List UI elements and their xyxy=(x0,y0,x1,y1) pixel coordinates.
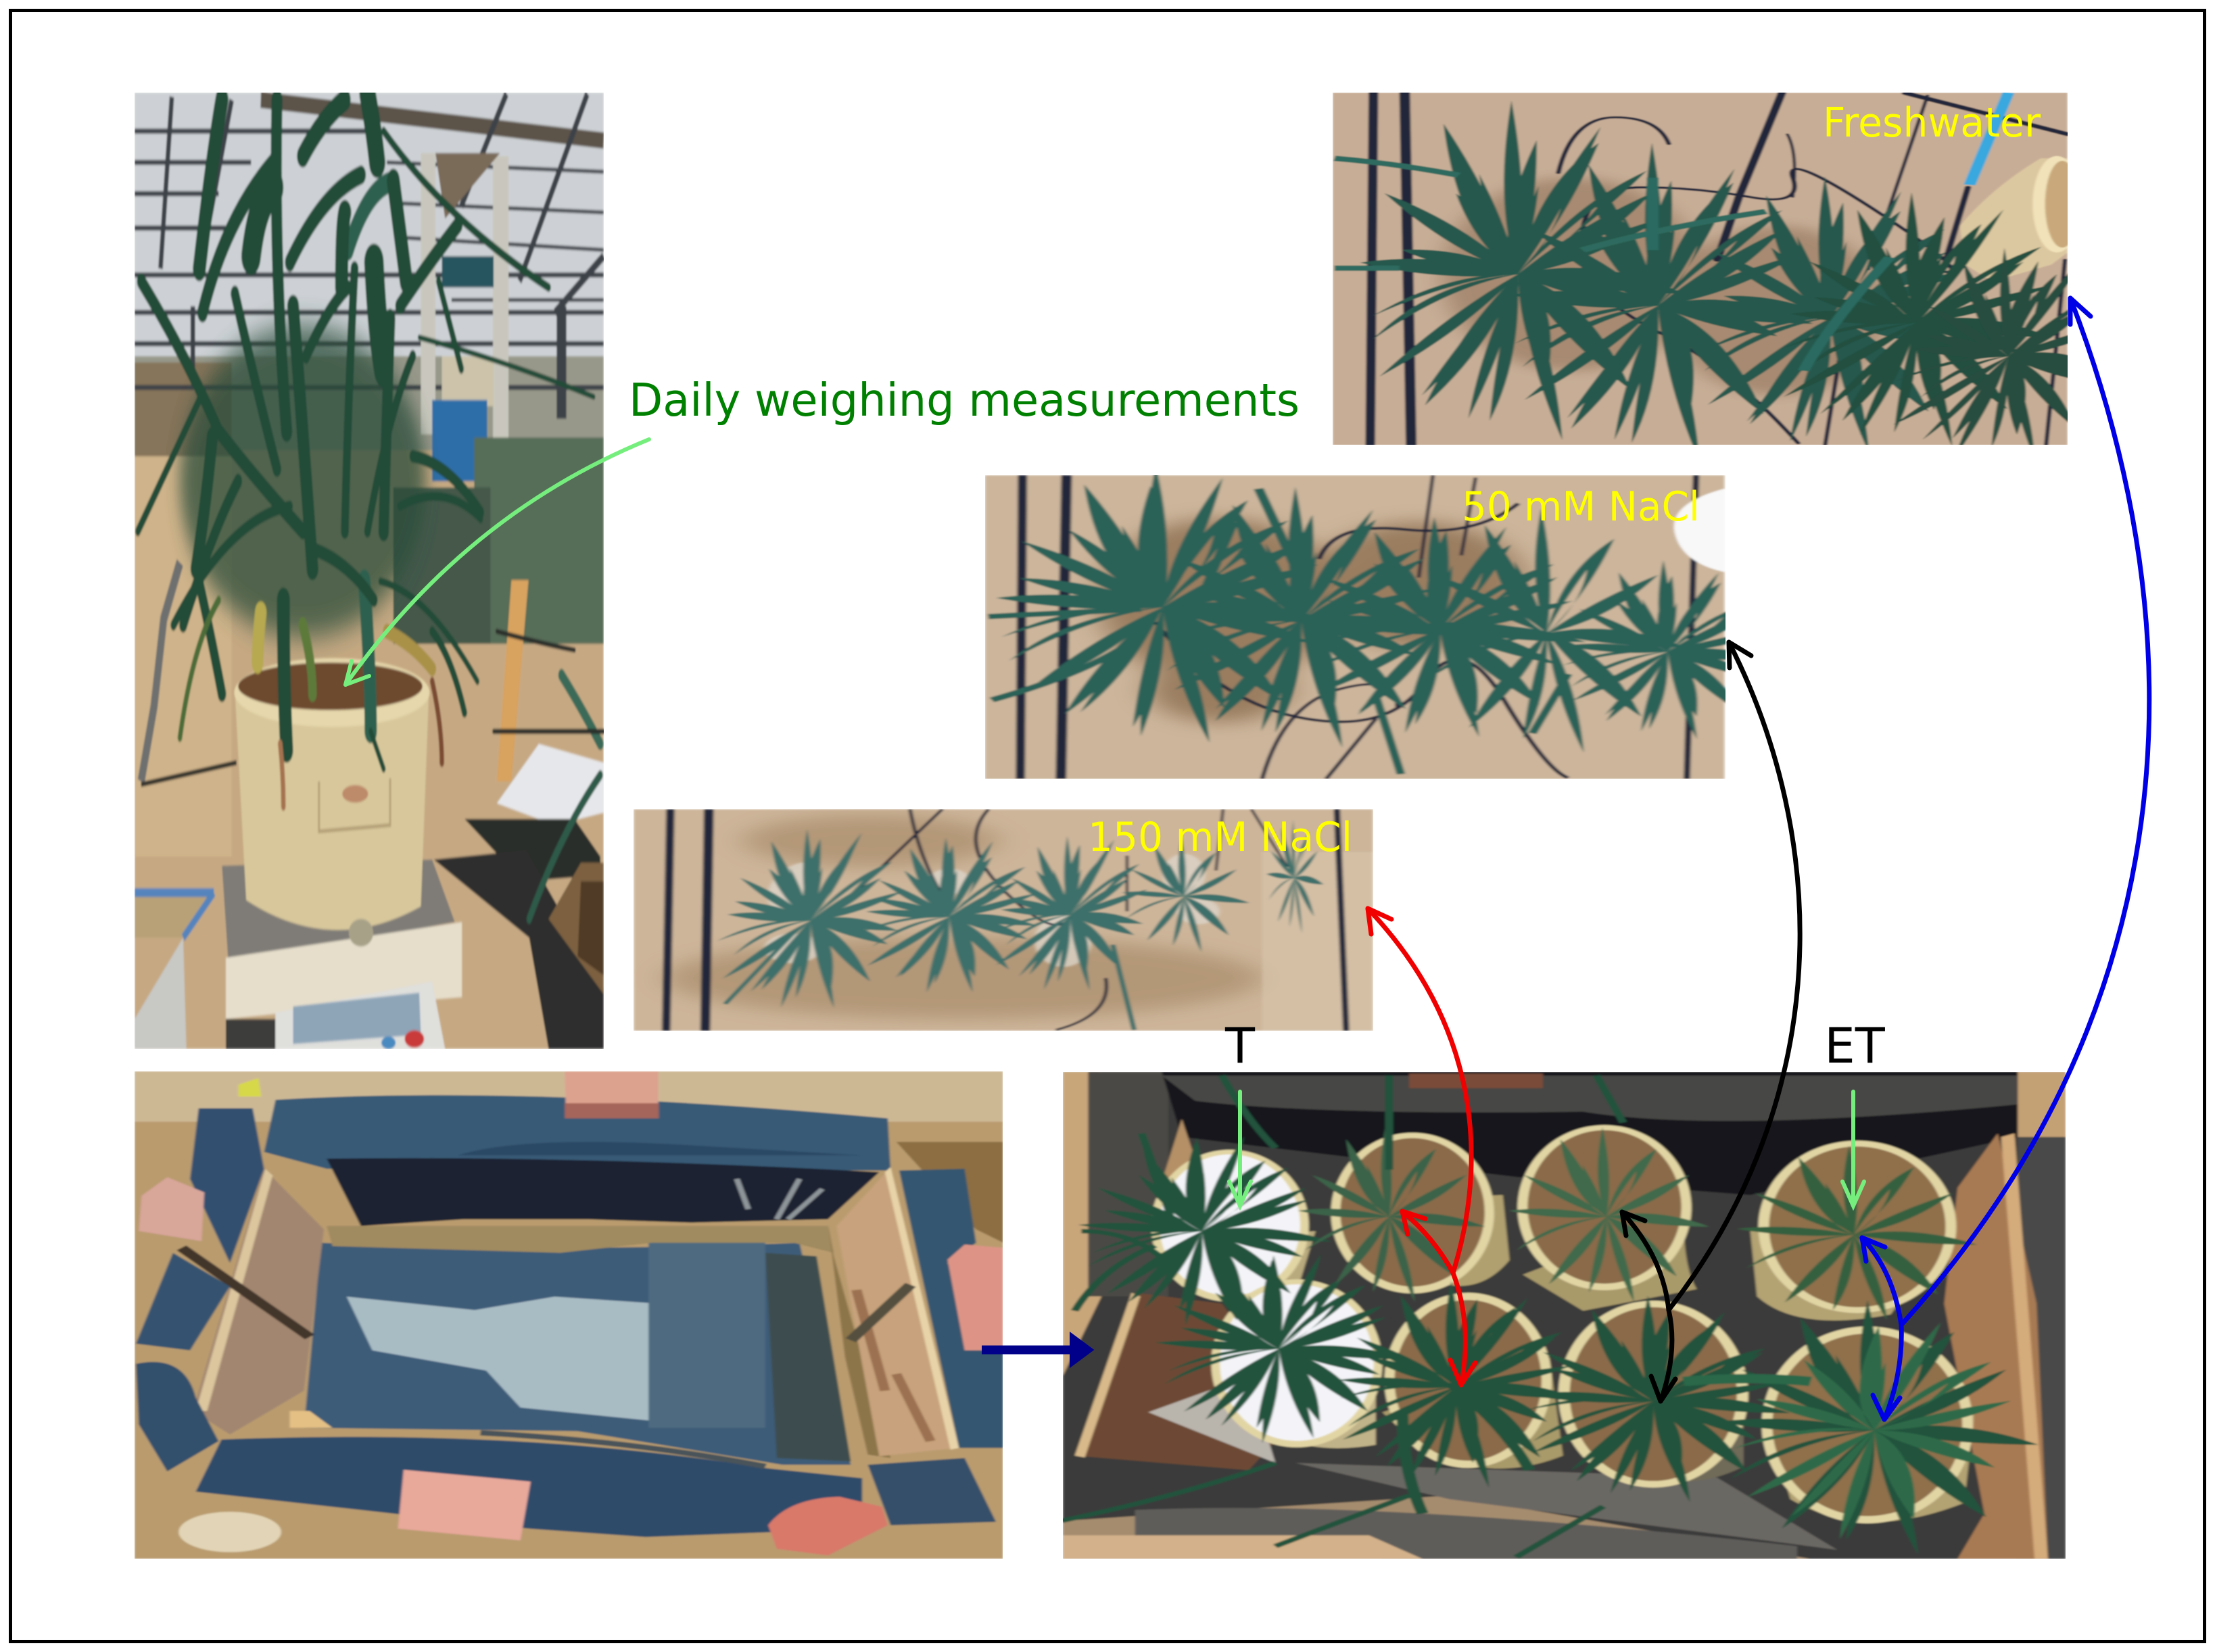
arrow: ET down to pot xyxy=(1842,1092,1864,1206)
dark back wall xyxy=(327,1158,879,1226)
bricks xyxy=(139,1071,1003,1555)
label: 150 mM NaCl: 150 mM NaCl xyxy=(1088,814,1352,861)
side and bottom mesh xyxy=(136,1169,1003,1537)
photo: freshwater plot xyxy=(1312,93,2185,469)
white pot xyxy=(1674,489,1725,572)
wooden boards xyxy=(1075,1119,2048,1559)
darker soil area xyxy=(665,815,1262,1019)
arrow: weighing to pot xyxy=(346,439,649,685)
darker soil patches xyxy=(1099,518,1525,722)
arrow: black pair to 50 mM NaCl xyxy=(1622,642,1800,1401)
background plants xyxy=(135,325,604,856)
arrow: T down to pot xyxy=(1229,1092,1251,1206)
label: ET: ET xyxy=(1824,1017,1886,1074)
photo: potted plant on weighing scale xyxy=(135,93,604,1049)
darker soil patches xyxy=(1442,178,1884,395)
salt crusts xyxy=(757,854,1220,967)
arrow: red pair to 150 mM NaCl xyxy=(1368,908,1475,1385)
pots xyxy=(1151,1125,1974,1524)
floor mesh xyxy=(304,1223,890,1465)
plants xyxy=(1056,1075,2075,1558)
wooden boards xyxy=(181,1167,959,1457)
arrow: pit to pots xyxy=(982,1334,1092,1365)
arrow: blue pair to freshwater xyxy=(1862,298,2149,1419)
irrigation lines xyxy=(1371,93,2068,445)
plants xyxy=(680,819,1323,1030)
sand and mesh surround xyxy=(1063,1072,2066,1559)
irrigation lines xyxy=(666,809,1346,1031)
photo: 50 mM NaCl plot xyxy=(952,458,1818,779)
irrigation lines xyxy=(1020,475,1696,779)
wooden post and papers xyxy=(434,580,604,1049)
greenhouse background xyxy=(135,93,604,481)
label: 50 mM NaCl: 50 mM NaCl xyxy=(1462,483,1700,531)
label: Daily weighing measurements: Daily weighing measurements xyxy=(629,374,1300,427)
label: Freshwater: Freshwater xyxy=(1823,99,2041,147)
photo: pots with plants inside pit xyxy=(1056,1072,2075,1559)
label: T: T xyxy=(1224,1017,1256,1074)
photo: empty pit lined with mesh xyxy=(135,1071,1003,1559)
top mesh strip xyxy=(190,1095,890,1263)
blue tube and pot xyxy=(1960,93,2081,281)
plants xyxy=(1312,101,2185,469)
plant leaves xyxy=(138,93,604,919)
pot on scale xyxy=(135,658,462,1049)
photo: 150 mM NaCl plot xyxy=(634,809,1373,1031)
plants xyxy=(952,458,1818,774)
